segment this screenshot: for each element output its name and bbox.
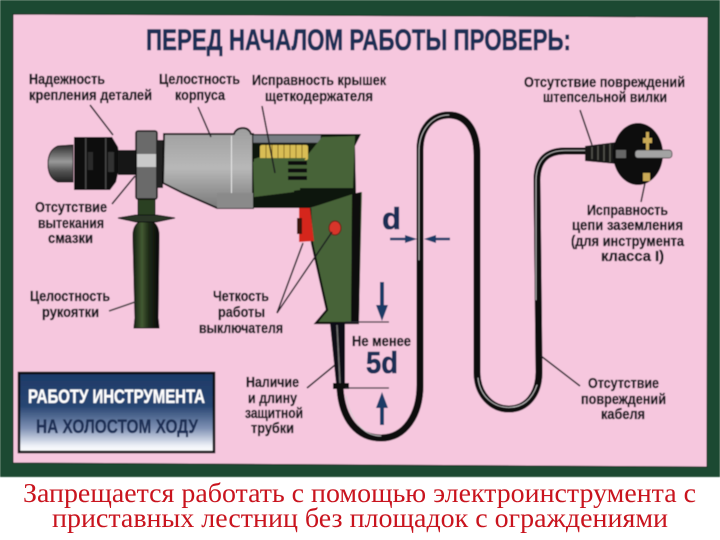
d dimension: d xyxy=(382,201,401,236)
label: switch: работы xyxy=(218,305,265,321)
label: switch: Четкость xyxy=(213,289,269,305)
trigger xyxy=(297,208,314,242)
label: brush holder covers: Исправность крышек xyxy=(252,73,387,89)
label: handle xyxy=(30,289,110,321)
label: plug damage xyxy=(524,75,685,106)
gray gear housing xyxy=(163,128,253,208)
label: grounding circuit: цепи заземления xyxy=(572,218,683,234)
label: lubricant leakage xyxy=(35,200,107,247)
protective tube xyxy=(330,323,349,389)
label: grounding circuit: класса I) xyxy=(601,249,664,265)
plug xyxy=(585,123,672,185)
d dimension xyxy=(382,201,450,243)
label: plug damage: штепсельной вилки xyxy=(543,90,667,106)
title: ПЕРЕД НАЧАЛОМ РАБОТЫ ПРОВЕРЬ: xyxy=(146,24,571,57)
callout: idle run: РАБОТУ ИНСТРУМЕНТА xyxy=(28,387,205,408)
label: protective tube: трубки xyxy=(251,421,294,437)
label: fastening xyxy=(29,72,152,104)
label: fastening: крепления деталей xyxy=(29,88,152,104)
warning text: приставных лестниц без площадок с ограждениями xyxy=(52,503,668,533)
brush holder xyxy=(260,145,308,160)
label: lubricant leakage: смазки xyxy=(48,231,93,247)
label: handle: Целостность xyxy=(30,289,110,305)
green motor body and handle xyxy=(253,134,362,323)
label: lubricant leakage: Отсутствие xyxy=(35,200,107,216)
button xyxy=(329,221,341,235)
pistol grip xyxy=(310,192,362,323)
label: brush holder covers: щеткодержателя xyxy=(265,89,373,105)
label: protective tube: и длину xyxy=(248,391,297,407)
label: protective tube: защитной xyxy=(245,406,303,422)
collar xyxy=(136,131,163,199)
callout: idle run xyxy=(19,373,214,452)
side handle xyxy=(118,198,175,328)
label: fastening: Надежность xyxy=(29,72,105,88)
label: brush holder covers xyxy=(252,73,387,105)
warning text xyxy=(23,478,696,533)
label: handle: рукоятки xyxy=(42,305,99,321)
cable xyxy=(340,115,590,438)
5d dimension: 5d xyxy=(366,345,398,380)
label: plug damage: Отсутствие повреждений xyxy=(524,75,685,91)
vents xyxy=(288,163,307,178)
label: lubricant leakage: вытекания xyxy=(38,216,104,232)
leader lines xyxy=(90,105,645,388)
label: cable damage: кабеля xyxy=(601,407,645,423)
label: protective tube: Наличие xyxy=(246,375,299,391)
label: switch: выключателя xyxy=(199,321,283,337)
label: grounding circuit: (для инструмента xyxy=(571,234,685,250)
label: housing: Целостность xyxy=(159,72,240,88)
label: cable damage: повреждений xyxy=(581,392,666,408)
label: protective tube xyxy=(245,375,303,437)
label: housing xyxy=(159,72,240,104)
warning text: Запрещается работать с помощью электроинструмента с xyxy=(23,478,696,508)
label: grounding circuit: Исправность xyxy=(587,203,668,219)
callout: idle run: НА ХОЛОСТОМ ХОДУ xyxy=(36,417,198,438)
label: grounding circuit xyxy=(571,203,685,265)
label: switch xyxy=(199,289,283,337)
chuck xyxy=(48,137,137,190)
label: cable damage: Отсутствие xyxy=(588,376,659,392)
5d dimension: Не менее xyxy=(352,334,411,350)
label: cable damage xyxy=(581,376,666,423)
5d dimension xyxy=(345,282,411,425)
label: housing: корпуса xyxy=(175,88,226,104)
